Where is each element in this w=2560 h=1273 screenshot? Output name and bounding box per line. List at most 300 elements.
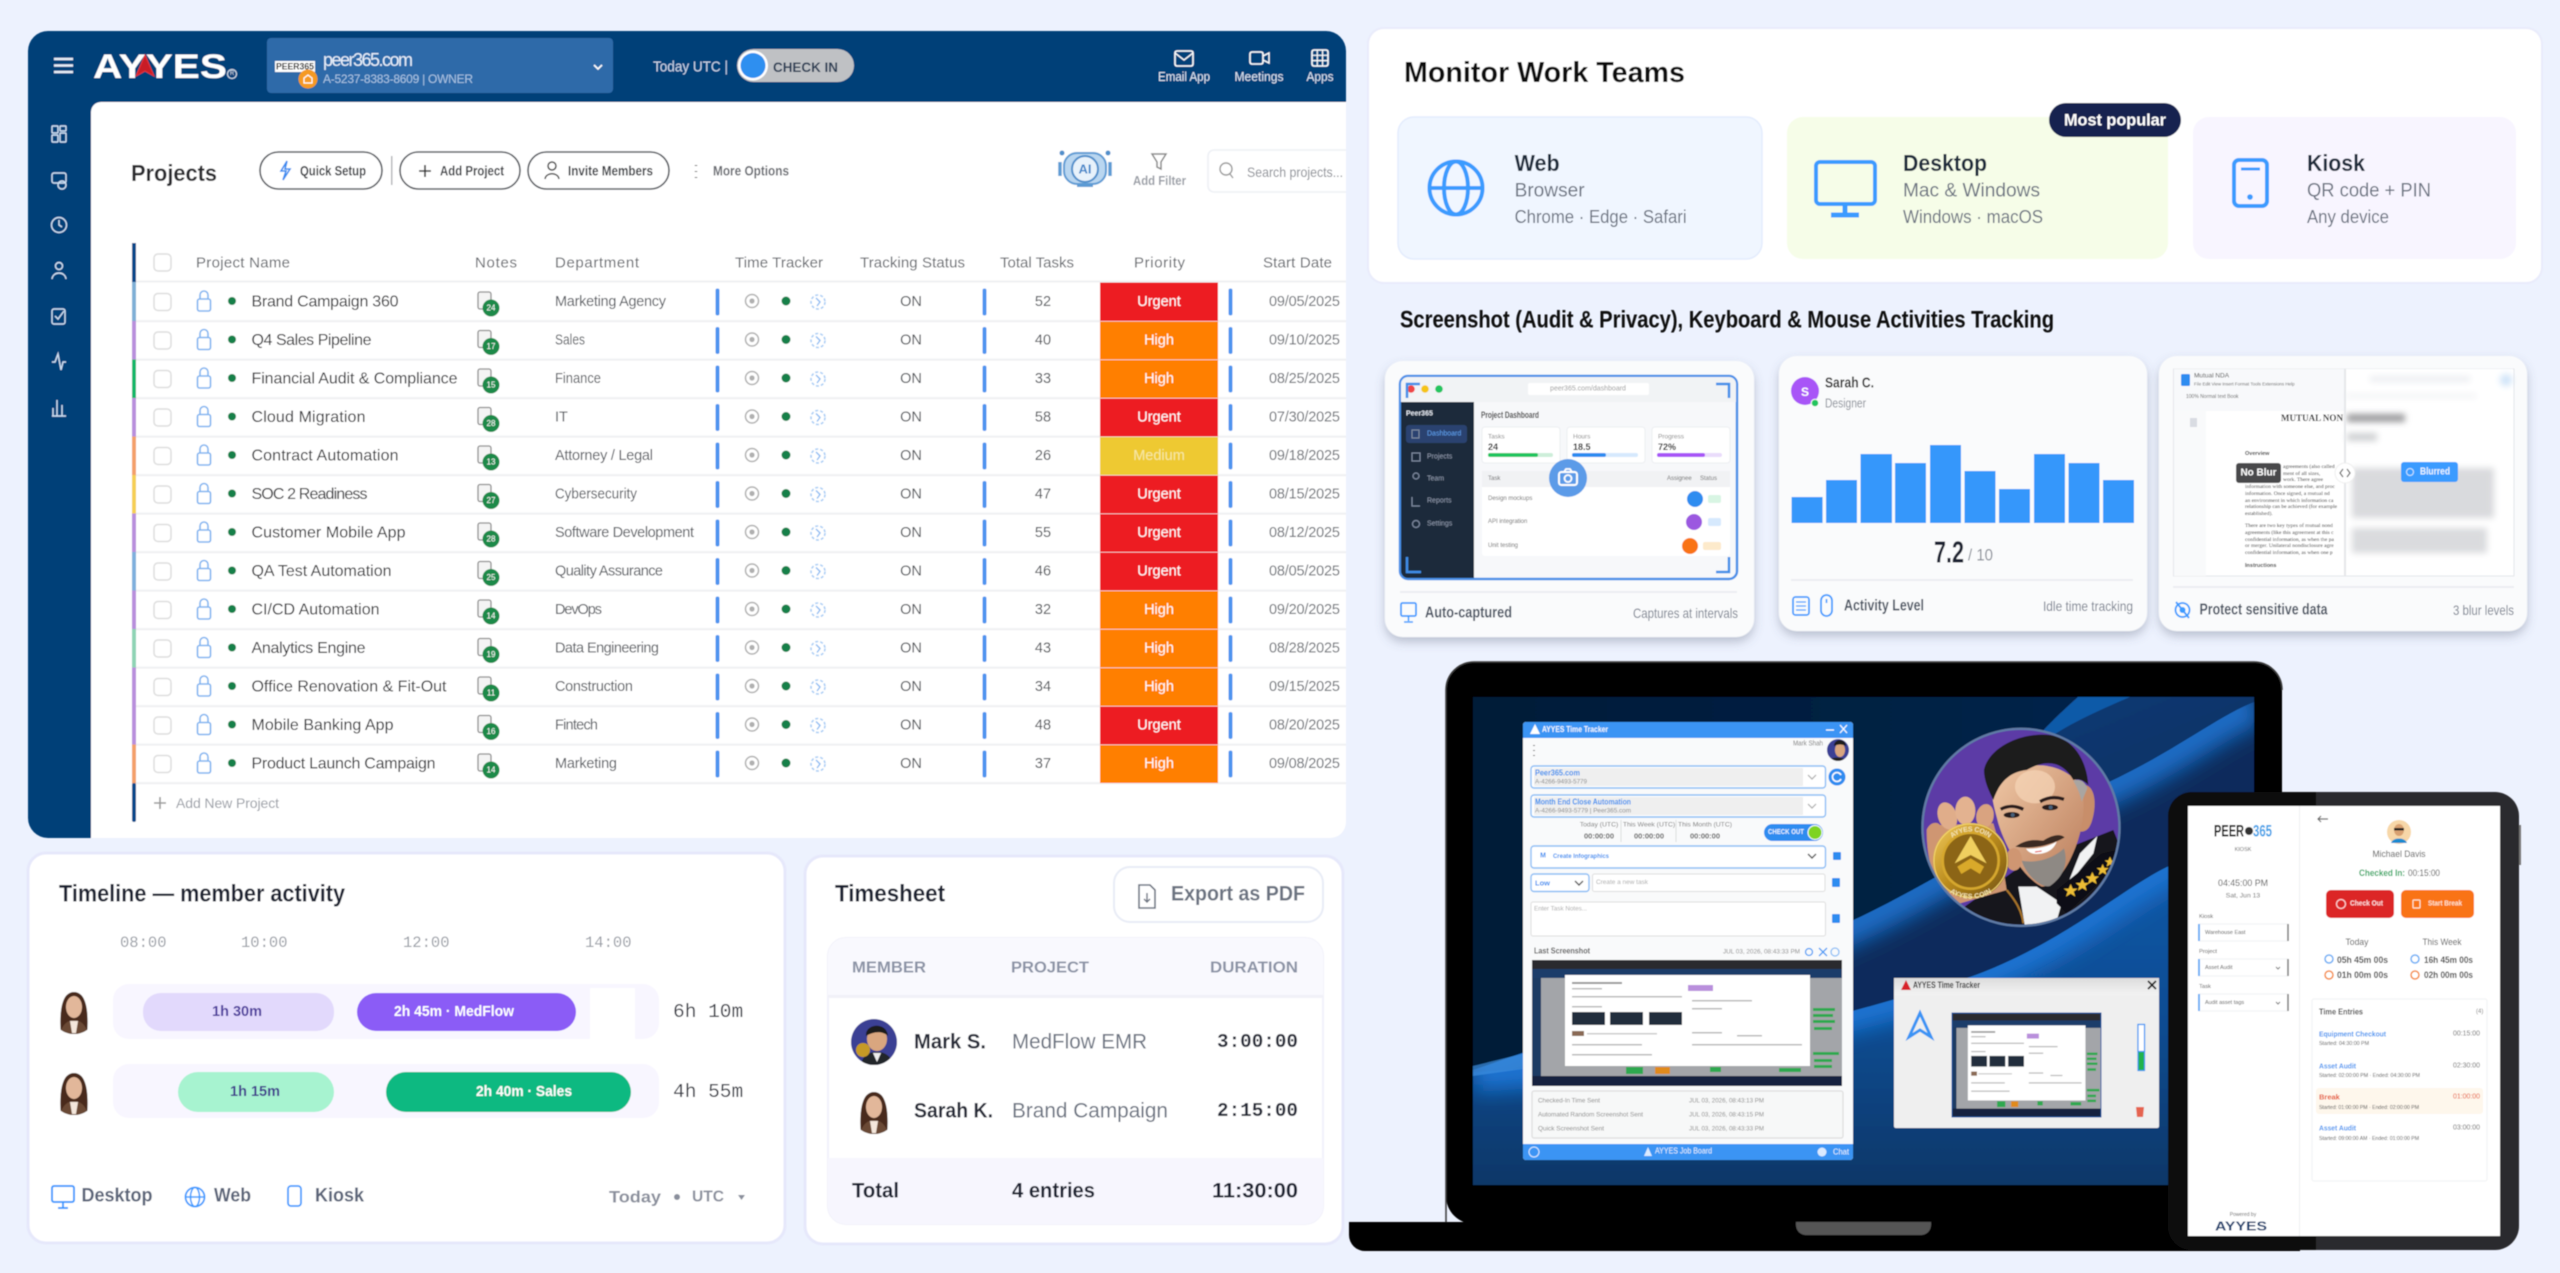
row: Office Renovation & Fit-Out: 34 bbox=[1035, 679, 1051, 695]
row: Contract Automation: Medium bbox=[1133, 448, 1185, 464]
row: Customer Mobile App: Software Development bbox=[555, 525, 694, 541]
hand bbox=[1927, 797, 2022, 903]
heading: Projects: Projects bbox=[131, 160, 217, 186]
activity log: Automated Random Screenshot Sent bbox=[1538, 1112, 1643, 1118]
wallpaper bbox=[1473, 697, 2254, 1185]
card: web: Web bbox=[1515, 150, 1560, 176]
table header: Department bbox=[555, 254, 640, 272]
row: CI/CD Automation: ON bbox=[900, 602, 922, 618]
row: Customer Mobile App: 55 bbox=[1035, 525, 1051, 541]
apps bbox=[1306, 50, 1334, 84]
row: CI/CD Automation: CI/CD Automation bbox=[252, 602, 380, 618]
screenshot mock-up: Design mockups bbox=[1488, 496, 1532, 502]
activity log: JUL 03, 2026, 08:43:33 PM bbox=[1689, 1126, 1764, 1132]
button: start break bbox=[2401, 890, 2474, 918]
meetings bbox=[1234, 52, 1284, 84]
row: Mobile Banking App: ON bbox=[900, 718, 922, 734]
score: 7.2 / 10: / 10 bbox=[1968, 546, 1993, 564]
table header bbox=[132, 243, 1346, 282]
screenshot mock-up: 72% bbox=[1658, 442, 1676, 452]
row: Customer Mobile App: 08/12/2025 bbox=[1269, 525, 1340, 541]
row: Brand Campaign 360: Urgent bbox=[1137, 294, 1181, 310]
row: Financial Audit & Compliance: Financial Audit & Compliance bbox=[252, 370, 458, 388]
tracker window: Mark Shah bbox=[1793, 740, 1823, 748]
screenshot mock-up: Team bbox=[1427, 476, 1444, 482]
tablet screen bbox=[2188, 806, 2500, 1236]
time entries list: Started: 01:00:00 PM · Ended: 02:00:00 PM bbox=[2319, 1105, 2419, 1111]
button: invite members: Invite Members bbox=[568, 164, 653, 178]
card: kiosk bbox=[2193, 117, 2516, 259]
tracker field: priority and new task bbox=[1531, 874, 1840, 892]
button: export as PDF bbox=[1114, 867, 1323, 922]
tracker field: task: Create Infographics bbox=[1553, 853, 1609, 860]
timeline row: member two bbox=[51, 1064, 743, 1118]
row: Brand Campaign 360: Marketing Agency bbox=[555, 294, 667, 310]
search box bbox=[1208, 150, 1346, 192]
row: Brand Campaign 360: ON bbox=[900, 294, 922, 310]
button: invite members bbox=[528, 152, 669, 189]
row: Analytics Engine: High bbox=[1144, 640, 1174, 656]
row: SOC 2 Readiness: Cybersecurity bbox=[555, 486, 638, 502]
badge: blurred bbox=[2401, 462, 2458, 482]
email app bbox=[1158, 51, 1210, 84]
card: desktop: Desktop bbox=[1903, 150, 1987, 176]
row: Office Renovation & Fit-Out: Office Renovation & Fit-Out bbox=[252, 678, 447, 696]
row: QA Test Automation: ON bbox=[900, 564, 922, 580]
screenshot mock-up: Peer365 bbox=[1406, 410, 1433, 418]
tracker field: workspace: Peer365.com bbox=[1535, 768, 1580, 778]
badge: most popular bbox=[2049, 103, 2181, 137]
row: Mobile Banking App: Fintech bbox=[555, 718, 598, 734]
panel: monitor work teams bbox=[1368, 28, 2542, 283]
timesheet row: Sarah K.: Brand Campaign bbox=[1012, 1100, 1168, 1122]
row: QA Test Automation: QA Test Automation bbox=[252, 563, 392, 580]
tracker field: project: A-4266-9493-5779 | Peer365.com bbox=[1535, 808, 1631, 814]
document preview: no blur side: Mutual NDA bbox=[2194, 372, 2230, 380]
activity log: JUL 03, 2026, 08:43:13 PM bbox=[1689, 1098, 1764, 1104]
screenshot mock-up: Assignee bbox=[1667, 476, 1692, 482]
row: Cloud Migration: Cloud Migration bbox=[252, 409, 366, 426]
timesheet total: 4 entries bbox=[1012, 1180, 1095, 1202]
panel: timesheet bbox=[805, 856, 1343, 1244]
check-in toggle bbox=[737, 49, 854, 82]
tracker field: task bbox=[1531, 846, 1841, 868]
document preview: no blur side: relationship can be achieved (for example bbox=[2245, 503, 2338, 510]
row: QA Test Automation: 46 bbox=[1035, 564, 1051, 580]
row: Financial Audit & Compliance: 08/25/2025 bbox=[1269, 371, 1340, 387]
row: Office Renovation & Fit-Out: ON bbox=[900, 679, 922, 695]
row: Contract Automation: 26 bbox=[1035, 448, 1051, 464]
time entries list bbox=[2312, 999, 2487, 1181]
footer: auto-captured bbox=[1401, 603, 1738, 622]
workspace selector: peer365.com bbox=[323, 50, 413, 70]
legend: platforms: Desktop bbox=[82, 1186, 152, 1206]
card: web: Chrome · Edge · Safari bbox=[1515, 207, 1687, 227]
badge: no blur: No Blur bbox=[2240, 468, 2277, 478]
card: kiosk: QR code + PIN bbox=[2307, 180, 2431, 202]
timesheet row: Mark S.: MedFlow EMR bbox=[1012, 1030, 1147, 1054]
logo: AYYES: AYYES bbox=[93, 48, 227, 86]
kiosk totals: 02h 00m 00s bbox=[2424, 970, 2473, 980]
icon: tablet bbox=[2234, 160, 2267, 206]
time entries list: Started: 02:00:00 PM · Ended: 04:30:00 PM bbox=[2319, 1073, 2420, 1079]
tracker time totals bbox=[1580, 820, 1732, 842]
tracker footer bbox=[1523, 1144, 1853, 1160]
table bbox=[132, 243, 1346, 822]
row: Office Renovation & Fit-Out: 11 bbox=[487, 688, 496, 698]
time entries list: Started: 09:00:00 AM · Ended: 01:00:00 PM bbox=[2319, 1136, 2419, 1142]
timeline row: member one: 2h 45m · MedFlow bbox=[394, 1004, 515, 1020]
row: SOC 2 Readiness: SOC 2 Readiness bbox=[252, 486, 368, 503]
small screenshot window bbox=[1894, 978, 2159, 1128]
row: Cloud Migration: 58 bbox=[1035, 410, 1051, 426]
screenshot mock-up: Progress bbox=[1658, 434, 1685, 440]
row: Q4 Sales Pipeline: High bbox=[1144, 332, 1174, 348]
footer: activity level: Activity Level bbox=[1844, 598, 1924, 614]
timesheet row: Mark S.: Mark S. bbox=[914, 1030, 986, 1054]
time entries list: Break bbox=[2319, 1092, 2341, 1102]
tracker field: workspace: A-4266-9493-5779 bbox=[1535, 778, 1587, 786]
kiosk sidebar: Asset Audit bbox=[2205, 965, 2233, 971]
tracker footer: AYYES Job Board bbox=[1655, 1146, 1712, 1156]
tracker time totals: Today (UTC) bbox=[1580, 822, 1618, 828]
panel: timeline bbox=[28, 853, 785, 1243]
photo: presenter with coin bbox=[1920, 726, 2122, 928]
time axis: 10:00 bbox=[241, 934, 288, 952]
button: quick setup bbox=[260, 152, 382, 189]
card: web: Browser bbox=[1515, 180, 1585, 202]
row: Customer Mobile App: Customer Mobile App bbox=[252, 524, 406, 542]
score: 7.2 / 10: 7.2 bbox=[1934, 534, 1964, 570]
row: Customer Mobile App: ON bbox=[900, 525, 922, 541]
card: kiosk: Any device bbox=[2307, 207, 2389, 227]
tracker field: priority and new task: Low bbox=[1535, 878, 1550, 888]
row: Analytics Engine: 08/28/2025 bbox=[1269, 640, 1340, 656]
timeline row: member two: 4h 55m bbox=[673, 1081, 743, 1103]
row: Mobile Banking App: 08/20/2025 bbox=[1269, 718, 1340, 734]
time axis: 08:00 bbox=[120, 934, 167, 952]
document preview: no blur side: 100% Normal text Book bbox=[2186, 394, 2239, 400]
row: QA Test Automation bbox=[132, 552, 1346, 592]
row: Q4 Sales Pipeline: 17 bbox=[487, 342, 496, 351]
document preview: no blur side: work. There agree bbox=[2283, 477, 2324, 483]
tracker footer: Chat bbox=[1833, 1148, 1850, 1156]
logo: AYYES: R bbox=[230, 71, 235, 77]
member: Sarah C.: S bbox=[1801, 385, 1809, 399]
row: QA Test Automation: Quality Assurance bbox=[555, 564, 663, 580]
laptop base bbox=[1349, 1222, 2300, 1251]
screenshot mock-up: API integration bbox=[1488, 519, 1527, 525]
jacket and shirt bbox=[1964, 830, 2118, 926]
kiosk main: Michael Davis bbox=[2372, 849, 2426, 859]
heading: timeline: Timeline — member activity bbox=[59, 880, 346, 908]
workspace selector bbox=[267, 38, 613, 93]
row: Q4 Sales Pipeline: Sales bbox=[555, 332, 585, 348]
last screenshot label: JUL 03, 2026, 08:43:33 PM bbox=[1723, 948, 1800, 956]
table header: Time Tracker bbox=[735, 254, 823, 272]
document preview: no blur side: ment of all sizes, bbox=[2283, 470, 2321, 477]
row: Cloud Migration: IT bbox=[555, 410, 568, 426]
laptop body bbox=[1446, 662, 2282, 1224]
row: Product Launch Campaign: High bbox=[1144, 756, 1174, 772]
badge: most popular: Most popular bbox=[2064, 110, 2166, 130]
timesheet row: Sarah K.: 2:15:00 bbox=[1217, 1100, 1298, 1122]
button: check out: Check Out bbox=[2350, 900, 2384, 908]
kiosk sidebar: Project bbox=[2199, 949, 2217, 955]
kiosk sidebar: Sat, Jun 13 bbox=[2226, 892, 2260, 900]
row: CI/CD Automation bbox=[132, 590, 1346, 630]
document preview: no blur side: agreements (also called bbox=[2283, 463, 2335, 470]
document preview: no blur side: or merger. Unilateral nondisclosure agre bbox=[2245, 543, 2334, 549]
document preview: no blur side: agreements (like this agreement at this c bbox=[2245, 529, 2334, 536]
tracker time totals: 00:00:00 bbox=[1634, 832, 1664, 840]
time axis: 12:00 bbox=[403, 934, 450, 952]
time entries list: Started: 04:30:00 PM bbox=[2319, 1041, 2369, 1047]
tracker field: notes bbox=[1531, 902, 1840, 936]
tablet kiosk bbox=[2168, 792, 2521, 1250]
kiosk totals: Today bbox=[2346, 937, 2369, 947]
icon: camera button bbox=[1549, 459, 1587, 497]
button: start break: Start Break bbox=[2428, 900, 2462, 908]
icon: hamburger menu bbox=[54, 59, 73, 72]
screenshot mock-up: Settings bbox=[1427, 520, 1453, 528]
row: CI/CD Automation: DevOps bbox=[555, 602, 602, 618]
footer: protect sensitive data: Protect sensitive data bbox=[2200, 602, 2328, 618]
kiosk main bbox=[2312, 816, 2487, 1181]
footer: auto-captured: Captures at intervals bbox=[1633, 605, 1738, 621]
button: check out bbox=[2326, 890, 2394, 918]
table header: Tracking Status bbox=[860, 254, 965, 272]
kiosk sidebar: Kiosk bbox=[2199, 914, 2213, 920]
row: QA Test Automation: 08/05/2025 bbox=[1269, 564, 1340, 580]
row: Product Launch Campaign: 14 bbox=[487, 766, 496, 774]
row: Product Launch Campaign: 09/08/2025 bbox=[1269, 756, 1340, 772]
email app: Email App bbox=[1158, 70, 1210, 84]
row: Brand Campaign 360: 24 bbox=[487, 304, 496, 312]
row: CI/CD Automation: 32 bbox=[1035, 602, 1051, 618]
row: Financial Audit & Compliance: 15 bbox=[487, 380, 496, 390]
today UTC label: Today UTC | bbox=[653, 58, 728, 76]
search box: Search projects... bbox=[1247, 164, 1343, 180]
table column heads: MEMBER bbox=[852, 960, 926, 976]
badge: no blur bbox=[2236, 463, 2281, 483]
card: activity level bbox=[1779, 356, 2147, 631]
bar chart: activity bbox=[1792, 445, 2134, 523]
row: Product Launch Campaign bbox=[132, 744, 1346, 784]
row: Brand Campaign 360 bbox=[132, 282, 1346, 322]
icon: globe bbox=[1430, 162, 1482, 214]
timesheet row: Mark S.: 3:00:00 bbox=[1217, 1031, 1298, 1053]
icon: AI robot: AI bbox=[1078, 162, 1092, 176]
last screenshot label: Last Screenshot bbox=[1534, 946, 1590, 956]
head bbox=[1984, 735, 2095, 887]
kiosk totals: 05h 45m 00s bbox=[2337, 955, 2388, 965]
row: SOC 2 Readiness: 47 bbox=[1035, 486, 1051, 502]
separator bbox=[391, 156, 392, 185]
panel: projects dashboard bbox=[28, 31, 1346, 838]
row: Q4 Sales Pipeline: ON bbox=[900, 332, 922, 348]
footer: protect sensitive data: 3 blur levels bbox=[2453, 602, 2514, 618]
row: Customer Mobile App bbox=[132, 514, 1346, 553]
row: QA Test Automation: Urgent bbox=[1137, 564, 1181, 580]
row: Analytics Engine: ON bbox=[900, 640, 922, 656]
document preview: no blur side: File Edit View Insert Format Tools Extensions Help bbox=[2194, 382, 2295, 386]
screenshot mock-up: 18.5 bbox=[1573, 442, 1591, 452]
document preview: no blur side: Instructions bbox=[2245, 563, 2276, 569]
footer: activity level bbox=[1793, 595, 2133, 616]
kiosk totals: 01h 00m 00s bbox=[2337, 970, 2388, 980]
timeline row: member two: 2h 40m · Sales bbox=[476, 1084, 572, 1100]
laptop bbox=[1348, 660, 2301, 1252]
heading: screenshot and tracking: Screenshot (Audit & Privacy), Keyboard & Mouse Activities Tracking bbox=[1400, 306, 2054, 334]
icon: monitor bbox=[1816, 162, 1875, 215]
kiosk sidebar bbox=[2199, 822, 2288, 1234]
row: SOC 2 Readiness: 08/15/2025 bbox=[1269, 486, 1340, 502]
row: Office Renovation & Fit-Out bbox=[132, 668, 1346, 707]
table header: Total Tasks bbox=[1000, 254, 1074, 272]
capture corner brackets bbox=[1407, 384, 1729, 572]
document preview: no blur side: information. Once signed, a mutual nd bbox=[2245, 490, 2330, 497]
row: Brand Campaign 360: 52 bbox=[1035, 294, 1051, 310]
footer: activity level: Idle time tracking bbox=[2043, 598, 2133, 614]
collar stars bbox=[2064, 857, 2115, 897]
screenshot mock-up: Status bbox=[1700, 476, 1717, 482]
activity log: Checked-In Time Sent bbox=[1538, 1098, 1600, 1104]
button: quick setup: Quick Setup bbox=[300, 164, 366, 178]
time entries list: 03:00:00 bbox=[2453, 1124, 2480, 1132]
kiosk totals: This Week bbox=[2422, 937, 2462, 947]
row: Q4 Sales Pipeline: Q4 Sales Pipeline bbox=[252, 332, 372, 349]
button: add project bbox=[400, 152, 520, 189]
card: kiosk: Kiosk bbox=[2307, 150, 2365, 176]
card: protect sensitive data bbox=[2159, 356, 2527, 631]
add filter: Add Filter bbox=[1133, 174, 1186, 188]
kiosk sidebar: 365 bbox=[2253, 822, 2272, 840]
card: web bbox=[1398, 117, 1762, 259]
time entries list: 00:15:00 bbox=[2453, 1030, 2480, 1038]
row: Mobile Banking App: Urgent bbox=[1137, 718, 1181, 734]
document preview: no blur side: MUTUAL NON bbox=[2281, 413, 2343, 423]
time entries list: (4) bbox=[2476, 1009, 2483, 1015]
tracker field: workspace bbox=[1531, 766, 1846, 788]
row: SOC 2 Readiness: Urgent bbox=[1137, 486, 1181, 502]
card: desktop: Windows · macOS bbox=[1903, 207, 2043, 227]
check-out toggle: CHECK OUT bbox=[1768, 829, 1805, 836]
tracker time totals: 00:00:00 bbox=[1584, 832, 1614, 840]
timeline row: member one: 1h 30m bbox=[212, 1004, 262, 1020]
row: Contract Automation: 13 bbox=[487, 458, 496, 466]
member: Sarah C. bbox=[1791, 374, 1874, 410]
row: Brand Campaign 360: 09/05/2025 bbox=[1269, 294, 1340, 310]
row: Financial Audit & Compliance bbox=[132, 360, 1346, 399]
tracker time totals: This Week (UTC) bbox=[1623, 822, 1675, 828]
screenshot mock-up: Unit testing bbox=[1488, 543, 1518, 549]
timesheet row: Sarah K. bbox=[851, 1088, 1298, 1137]
small screenshot window: AYYES Time Tracker bbox=[1913, 980, 1980, 990]
button: export as PDF: Export as PDF bbox=[1171, 882, 1305, 906]
row: Q4 Sales Pipeline: 09/10/2025 bbox=[1269, 332, 1340, 348]
badge: blurred: Blurred bbox=[2420, 466, 2450, 478]
tracker window: AYYES Time Tracker bbox=[1542, 725, 1608, 734]
row: Product Launch Campaign: Marketing bbox=[555, 756, 617, 772]
row: CI/CD Automation: High bbox=[1144, 602, 1174, 618]
row: Financial Audit & Compliance: Finance bbox=[555, 371, 601, 387]
sidebar icons bbox=[52, 126, 66, 416]
check-in toggle: CHECK IN bbox=[773, 59, 838, 75]
tracker field: notes: Enter Task Notes... bbox=[1534, 906, 1587, 912]
row: CI/CD Automation: 14 bbox=[487, 612, 496, 620]
row: Cloud Migration: Urgent bbox=[1137, 410, 1181, 426]
row: Brand Campaign 360: Brand Campaign 360 bbox=[252, 294, 399, 310]
row: Mobile Banking App: Mobile Banking App bbox=[252, 717, 394, 734]
kiosk sidebar: KIOSK bbox=[2235, 847, 2252, 853]
screenshot mock-up: Task bbox=[1488, 476, 1501, 482]
screenshot mock-up: Hours bbox=[1573, 434, 1591, 440]
tracker field: priority and new task: Create a new task bbox=[1596, 879, 1649, 886]
timesheet total bbox=[852, 1180, 1298, 1202]
button: more options: More Options bbox=[713, 164, 789, 178]
timesheet row: Mark S. bbox=[851, 1019, 1298, 1068]
kiosk main: Checked In: bbox=[2359, 868, 2405, 878]
meetings: Meetings bbox=[1234, 70, 1284, 84]
row: Contract Automation: ON bbox=[900, 448, 922, 464]
kiosk sidebar: 04:45:00 PM bbox=[2218, 878, 2268, 888]
kiosk sidebar: PEER bbox=[2214, 822, 2244, 840]
table header: Start Date bbox=[1263, 254, 1332, 272]
document preview: no blur side: There are two key types of mutual nond bbox=[2245, 522, 2333, 529]
card: desktop: Mac & Windows bbox=[1903, 180, 2040, 202]
kiosk sidebar: Powered by bbox=[2230, 1212, 2257, 1218]
row: Customer Mobile App: 28 bbox=[487, 534, 496, 544]
footer: auto-captured: Auto-captured bbox=[1425, 604, 1512, 622]
screenshot mock-up: Dashboard bbox=[1427, 430, 1461, 438]
legend: platforms: Today bbox=[609, 1188, 662, 1206]
document preview: no blur side: Overview bbox=[2245, 451, 2270, 457]
legend: platforms bbox=[52, 1186, 745, 1208]
time axis: 14:00 bbox=[585, 934, 632, 952]
last screenshot label bbox=[1534, 946, 1839, 956]
screenshot mock-up: Project Dashboard bbox=[1481, 410, 1539, 420]
row: SOC 2 Readiness: ON bbox=[900, 486, 922, 502]
screenshot mock-up: Reports bbox=[1427, 498, 1452, 504]
add new project row bbox=[132, 783, 279, 822]
timesheet total: Total bbox=[852, 1180, 899, 1202]
activity log: JUL 03, 2026, 08:43:15 PM bbox=[1689, 1112, 1764, 1118]
row: Office Renovation & Fit-Out: High bbox=[1144, 679, 1174, 695]
heading: monitor work teams: Monitor Work Teams bbox=[1404, 57, 1685, 89]
row: Financial Audit & Compliance: ON bbox=[900, 371, 922, 387]
table header: Project Name bbox=[196, 254, 290, 272]
time entries list: 02:30:00 bbox=[2453, 1062, 2480, 1070]
row: Customer Mobile App: Urgent bbox=[1137, 525, 1181, 541]
table header: Priority bbox=[1134, 254, 1186, 272]
screenshot mock-up: 24 bbox=[1488, 442, 1498, 452]
screenshot mock-up: Projects bbox=[1427, 454, 1453, 460]
row: Office Renovation & Fit-Out: 09/15/2025 bbox=[1269, 679, 1340, 695]
row: Product Launch Campaign: ON bbox=[900, 756, 922, 772]
row: Q4 Sales Pipeline bbox=[132, 321, 1346, 361]
legend: platforms: UTC bbox=[692, 1188, 724, 1206]
tracker time totals: 00:00:00 bbox=[1690, 832, 1720, 840]
header bar bbox=[54, 38, 1334, 93]
tracker window bbox=[1523, 722, 1853, 1160]
timeline row: member two: 1h 15m bbox=[230, 1084, 280, 1100]
row: Financial Audit & Compliance: 33 bbox=[1035, 371, 1051, 387]
add filter bbox=[1133, 154, 1186, 188]
tracker field: project: Month End Close Automation bbox=[1535, 798, 1631, 806]
coin bbox=[1932, 822, 2009, 900]
time entries list: Asset Audit bbox=[2319, 1124, 2356, 1132]
